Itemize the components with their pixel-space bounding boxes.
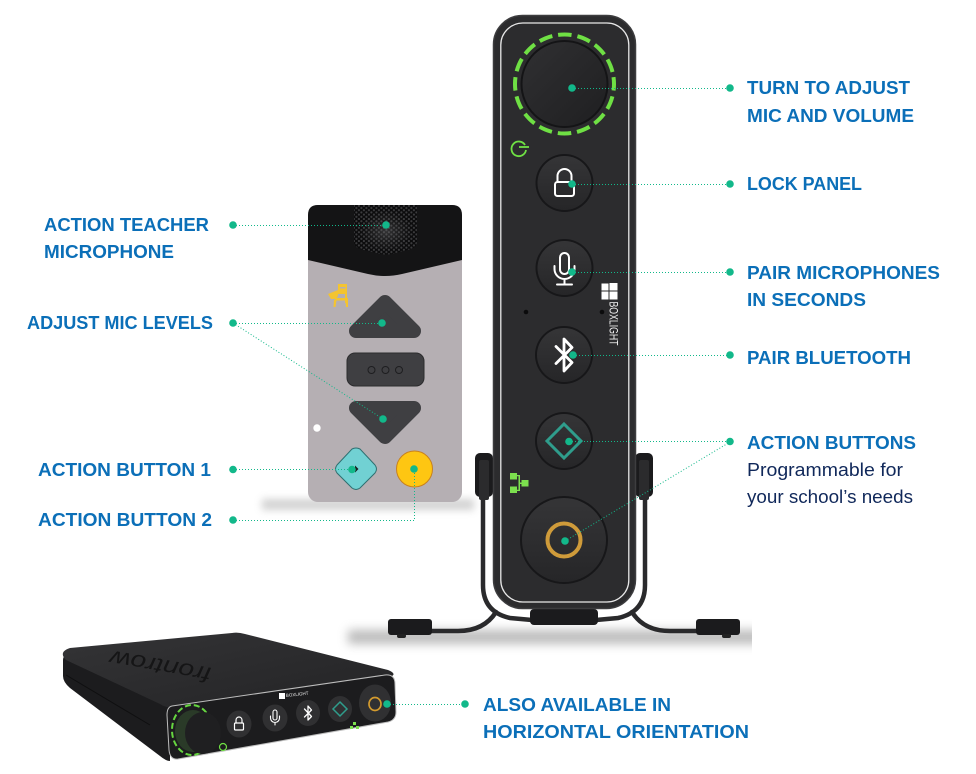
logo: BOXLIGHT vertical: BOXLIGHT [606, 302, 618, 346]
label: action button 2: ACTION BUTTON 2 [38, 510, 212, 530]
label: turn to adjust [747, 78, 914, 126]
label: action buttons: your school’s needs [747, 486, 913, 507]
mic button small [262, 704, 288, 732]
logo: BOXLIGHT vertical [602, 283, 618, 346]
label: adjust mic levels: ADJUST MIC LEVELS [27, 313, 213, 333]
volume up button [356, 302, 414, 331]
black top cap [308, 205, 462, 276]
icon: power small [220, 744, 226, 750]
label: pair microphones: PAIR MICROPHONES [747, 263, 940, 283]
label: lock panel: LOCK PANEL [747, 174, 862, 194]
yellow round button [396, 451, 432, 487]
action ring button [520, 496, 608, 584]
label: horizontal orientation: ALSO AVAILABLE IN [483, 695, 671, 715]
indicator light [313, 424, 321, 432]
microphone button [536, 239, 594, 297]
label: action teacher microphone [44, 215, 209, 262]
handheld teacher microphone device [262, 205, 474, 510]
stand shadow [348, 630, 788, 644]
speaker holes [524, 310, 604, 314]
label: turn to adjust: MIC AND VOLUME [747, 106, 914, 126]
stand centre foot [530, 609, 598, 625]
bluetooth button small [296, 700, 320, 726]
diamond button small [328, 696, 352, 722]
label: action teacher microphone: MICROPHONE [44, 242, 174, 262]
icon: network small [350, 722, 359, 729]
label: turn to adjust: TURN TO ADJUST [747, 78, 910, 98]
label: horizontal orientation: HORIZONTAL ORIENTATION [483, 722, 749, 742]
label: action buttons [747, 433, 916, 507]
side face [63, 656, 170, 761]
grey body [308, 205, 462, 502]
side seam [66, 675, 150, 725]
embossed brand on top: frontrow [105, 645, 213, 688]
panel inner outline [501, 23, 629, 602]
volume down button [356, 408, 414, 437]
vertical control panel with stand [348, 16, 788, 644]
icon: desk chair [328, 284, 348, 307]
leader lines [233, 88, 730, 704]
volume knob [509, 28, 620, 140]
knob with light ring [172, 705, 221, 755]
label: action buttons: ACTION BUTTONS [747, 433, 916, 453]
leader dots [229, 84, 734, 708]
label: action button 1: ACTION BUTTON 1 [38, 460, 211, 480]
stand left [388, 453, 532, 638]
label: action buttons: Programmable for [747, 459, 903, 480]
label: pair bluetooth: PAIR BLUETOOTH [747, 348, 911, 368]
panel body [494, 16, 636, 608]
front face [167, 675, 396, 759]
ring button small [359, 684, 391, 722]
label: pair microphones [747, 263, 940, 310]
lock button [536, 154, 594, 212]
microphone grille [354, 205, 417, 255]
label: pair microphones: IN SECONDS [747, 290, 866, 310]
device shadow [262, 499, 474, 510]
logo: BOXLIGHT small: BOXLIGHT [286, 691, 309, 698]
logo: BOXLIGHT small [279, 691, 309, 699]
teal diamond button [336, 448, 376, 490]
label: horizontal orientation [483, 695, 749, 742]
icon: power [511, 142, 529, 156]
bluetooth button [535, 326, 593, 384]
icon: network [510, 473, 528, 493]
top face [63, 633, 394, 707]
label: action teacher microphone: ACTION TEACHER [44, 215, 209, 235]
action diamond button [535, 412, 593, 470]
stand right [596, 453, 740, 638]
horizontal orientation device [63, 633, 396, 761]
lock button small [226, 710, 252, 738]
centre status button [347, 353, 424, 386]
